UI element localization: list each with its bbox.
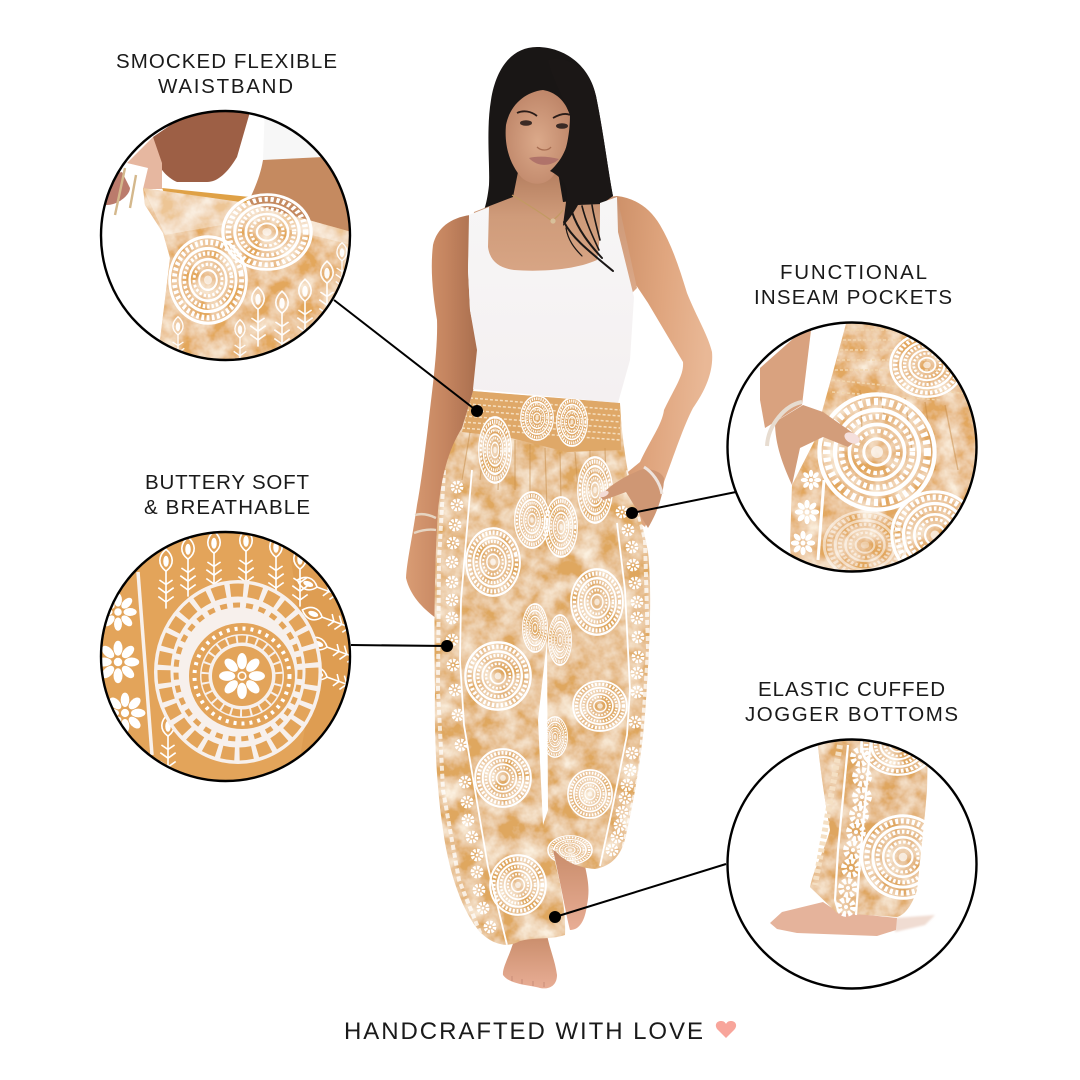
necklace — [512, 195, 563, 221]
heading: JOGGER BOTTOMS — [745, 703, 958, 726]
right bracelets — [644, 467, 662, 494]
circle ring — [101, 111, 350, 360]
face — [506, 90, 570, 184]
heading: INSEAM POCKETS — [754, 286, 952, 309]
waistband shirring — [462, 398, 620, 440]
fabric — [790, 320, 980, 575]
border motifs — [815, 745, 840, 885]
leaf motifs — [158, 534, 349, 766]
mandala prints — [168, 235, 248, 325]
waistband — [462, 391, 621, 452]
band wash — [143, 188, 352, 245]
leader line — [351, 645, 447, 646]
arm left — [406, 215, 478, 618]
fingers — [106, 172, 130, 205]
left flower column — [447, 482, 495, 932]
pant leg — [810, 735, 928, 917]
left bracelets — [414, 514, 436, 533]
stripe lines — [835, 738, 871, 915]
leader dot — [441, 640, 453, 652]
floor shadow — [895, 915, 935, 932]
icon: heart — [716, 1021, 736, 1038]
arm right — [600, 196, 712, 527]
mandala prints — [460, 396, 627, 915]
tagline: HANDCRAFTED WITH LOVE — [344, 1018, 703, 1045]
detail photo circle — [760, 324, 976, 570]
flowers — [791, 470, 821, 555]
right flower column — [607, 507, 643, 855]
heading: BUTTERY SOFT — [145, 471, 309, 494]
fold shading — [288, 540, 360, 785]
leader dot — [626, 507, 638, 519]
necklace pendant — [550, 218, 556, 224]
nail — [843, 430, 861, 446]
stripe lines — [460, 470, 630, 945]
mandala prints — [862, 816, 944, 898]
heading: FUNCTIONAL — [780, 261, 927, 284]
hair front strand — [548, 59, 613, 226]
smocking — [832, 330, 980, 400]
facial features — [517, 111, 570, 165]
callout: functional inseam pockets — [626, 261, 980, 579]
side stripe — [818, 480, 824, 560]
left foot — [503, 935, 557, 988]
large mandala — [154, 580, 322, 764]
hair wisps — [564, 205, 613, 271]
foot — [770, 902, 897, 936]
mandala prints — [891, 333, 963, 397]
leader line — [555, 864, 726, 917]
feather motifs — [172, 243, 348, 368]
gathered pleats — [462, 432, 606, 510]
hair back — [484, 47, 613, 210]
leg gap — [538, 640, 548, 825]
bracelet — [767, 402, 802, 446]
pleats — [860, 390, 958, 470]
heading: WAISTBAND — [158, 75, 293, 98]
zigzag borders — [438, 470, 648, 935]
callout: elastic cuffed jogger bottoms — [549, 678, 978, 990]
heading: SMOCKED FLEXIBLE — [116, 50, 337, 73]
callout: buttery soft and breathable — [97, 471, 453, 785]
forearm — [760, 322, 812, 428]
leader dot — [549, 911, 561, 923]
fingernail — [598, 490, 610, 498]
inner waistband — [162, 188, 250, 203]
detail photo circle — [726, 715, 978, 990]
leader line — [334, 300, 477, 411]
leader line — [632, 492, 736, 513]
drawstring — [115, 168, 136, 215]
leader dot — [471, 405, 483, 417]
side stripe — [138, 572, 152, 755]
torso — [245, 157, 352, 234]
flowers — [102, 594, 146, 732]
detail photo circle — [100, 105, 352, 368]
circle ring — [728, 740, 976, 988]
heading: & BREATHABLE — [144, 496, 310, 519]
hand — [775, 405, 860, 485]
hand — [127, 137, 162, 189]
right foot — [553, 850, 588, 930]
circle ring — [728, 322, 976, 572]
heading — [745, 678, 958, 726]
heading — [116, 50, 337, 98]
flower column — [839, 750, 869, 914]
white top — [263, 105, 340, 160]
harem pants — [434, 391, 650, 945]
model figure — [406, 47, 712, 988]
heading — [144, 471, 310, 519]
white tank top — [468, 197, 634, 403]
pants base — [434, 391, 650, 945]
detail photo circle — [102, 533, 349, 780]
upper arm — [153, 112, 250, 182]
heading: ELASTIC CUFFED — [758, 678, 945, 701]
circle ring — [101, 532, 350, 781]
torso skin — [468, 172, 637, 300]
fabric — [143, 188, 352, 362]
right hand in pocket — [600, 469, 664, 528]
heading — [754, 261, 952, 309]
callout: smocked flexible waistband — [100, 50, 483, 417]
